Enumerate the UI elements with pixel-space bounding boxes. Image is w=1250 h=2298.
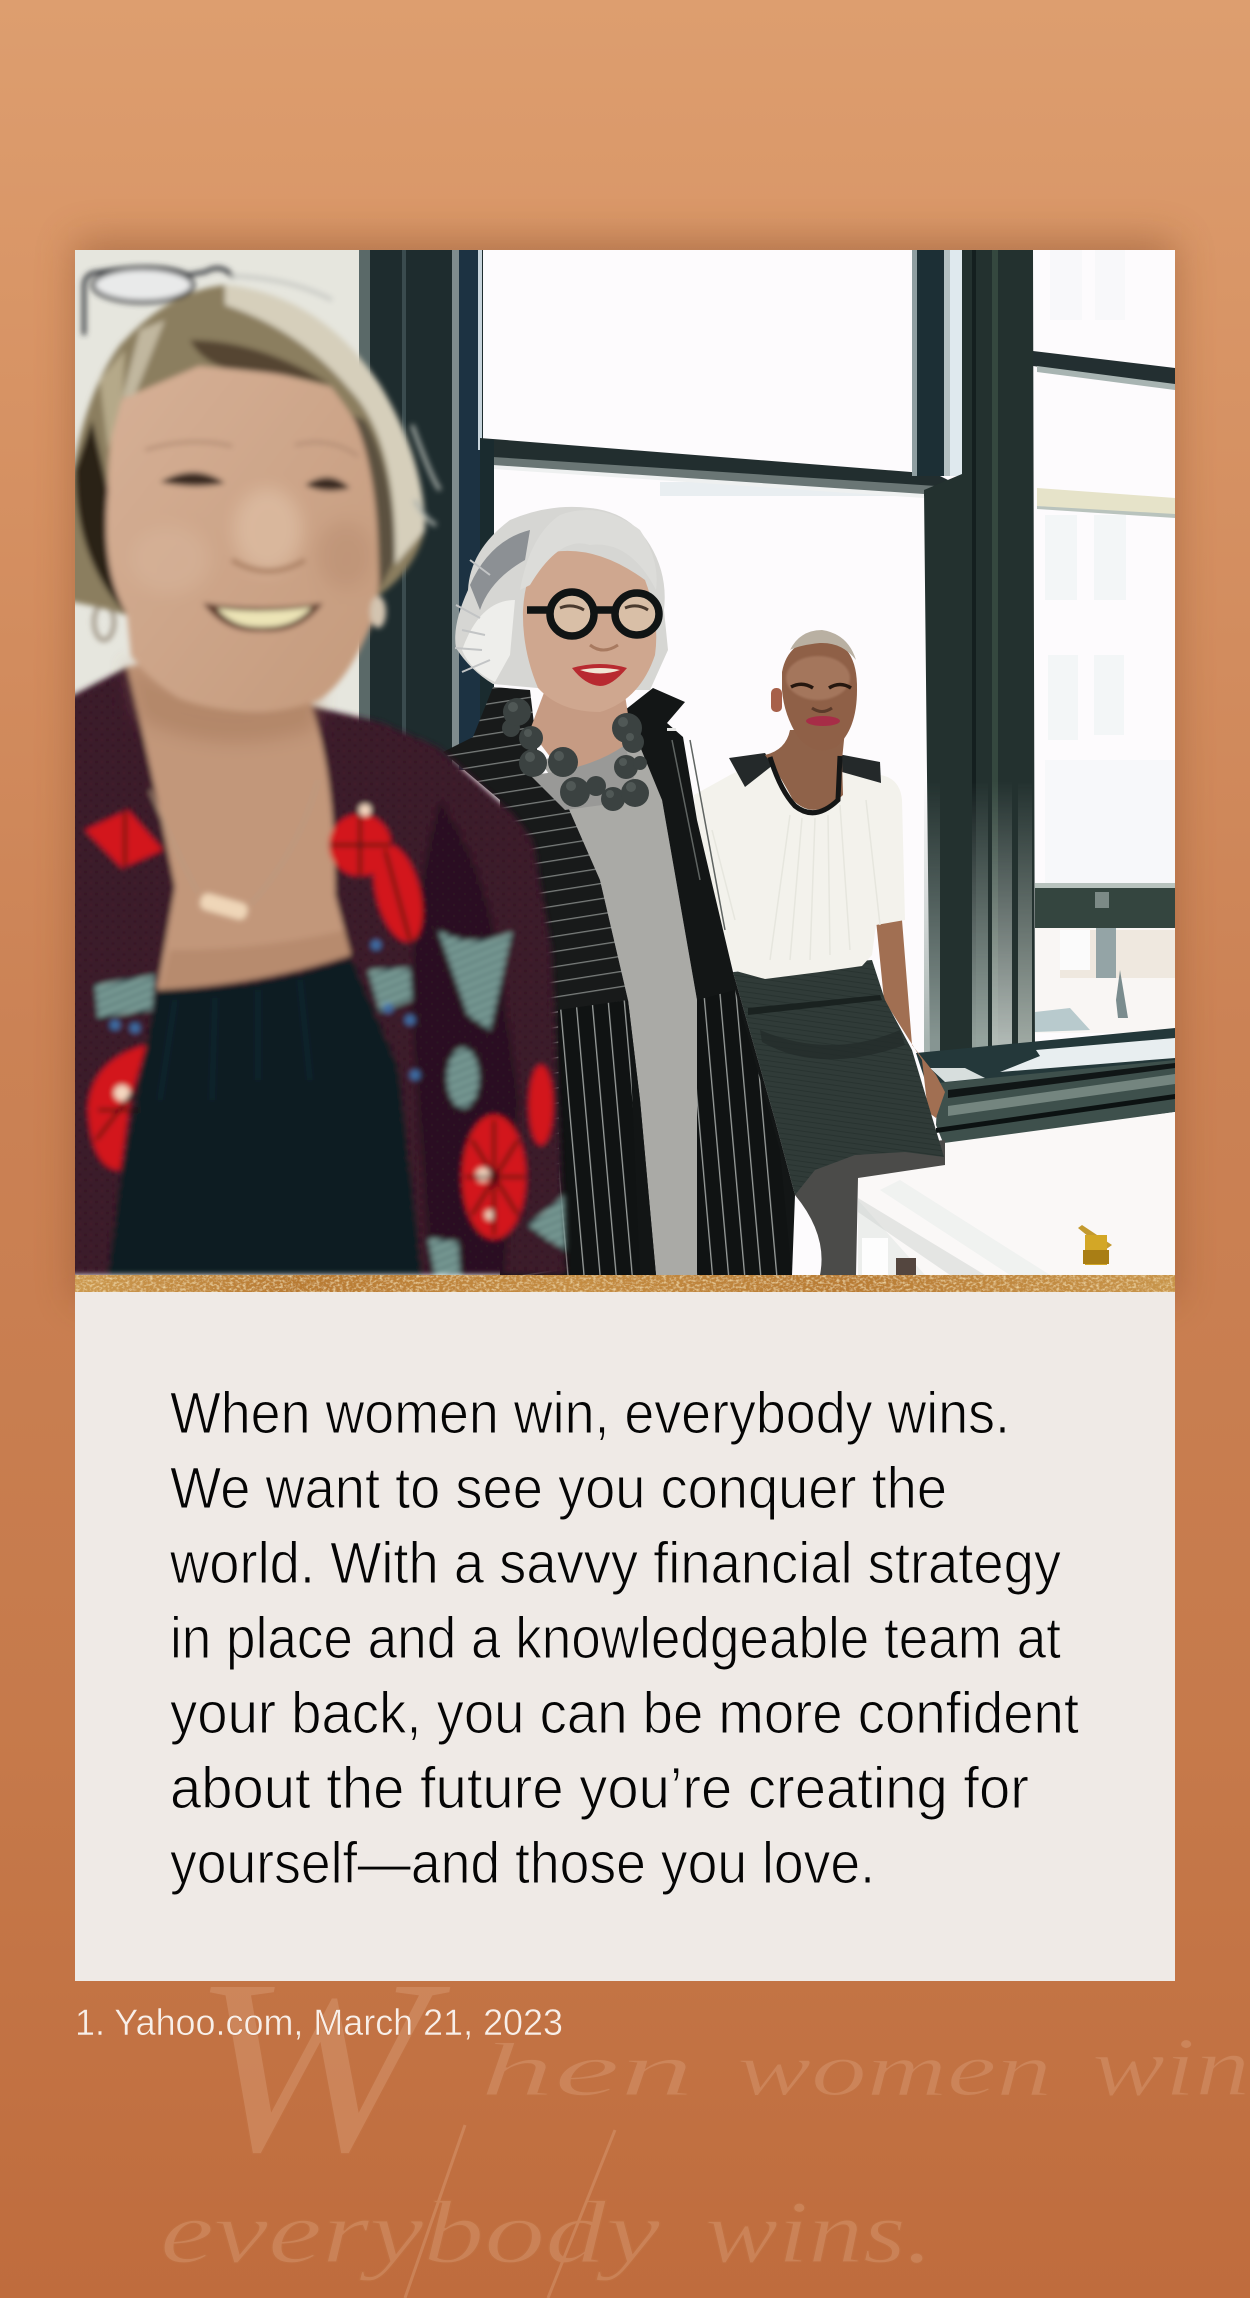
top sash right stile	[912, 250, 962, 476]
gold foil strip	[75, 1275, 1175, 1292]
background script watermark: win	[1092, 2020, 1250, 2114]
fringe	[526, 526, 644, 587]
background script watermark: hen	[480, 2027, 694, 2112]
neck	[532, 694, 628, 767]
reflection below upper sash	[660, 482, 892, 496]
neck and chest	[765, 730, 845, 810]
body copy: When women win, everybody wins.	[170, 1381, 1010, 1446]
body copy: your back, you can be more confident	[170, 1681, 1079, 1746]
brick wall	[75, 250, 361, 750]
face highlights	[234, 488, 302, 572]
right pane rails	[1033, 351, 1175, 928]
brass hardware	[1078, 1225, 1112, 1265]
body copy: about the future you’re creating for	[170, 1756, 1029, 1821]
wispy hair	[412, 425, 440, 525]
left window frame	[359, 250, 483, 770]
upper sash rail	[480, 438, 948, 486]
skirt	[733, 960, 944, 1195]
grey neckline	[530, 745, 640, 810]
nose	[590, 645, 618, 650]
body copy: We want to see you conquer the	[170, 1456, 947, 1521]
body copy: world. With a savvy financial strategy	[169, 1531, 1061, 1596]
legs	[792, 1140, 945, 1275]
red motifs	[85, 810, 553, 1239]
eyes and brows	[160, 472, 350, 491]
bead necklace	[502, 698, 649, 811]
photo: three women by a window	[60, 250, 1175, 1275]
body copy	[169, 1381, 1079, 1896]
background script watermark: wins.	[705, 2183, 933, 2282]
jacket	[60, 667, 566, 1275]
lips	[572, 664, 627, 686]
glasses	[527, 592, 659, 636]
blouse	[694, 756, 905, 979]
background script watermark: women	[737, 2027, 1052, 2112]
hair back	[455, 507, 668, 690]
necklace chain and pendant	[150, 780, 318, 905]
footnote: 1. Yahoo.com, March 21, 2023	[75, 2002, 563, 2043]
woman at right	[694, 630, 945, 1275]
glasses on head	[84, 268, 332, 335]
body copy: in place and a knowledgeable team at	[170, 1606, 1061, 1671]
teal stripe motifs	[95, 930, 566, 1275]
text panel	[75, 1292, 1175, 1981]
smile	[203, 603, 323, 631]
hair highlights	[225, 285, 425, 565]
background script watermark	[160, 1928, 1250, 2298]
head	[782, 643, 857, 738]
face	[106, 366, 379, 712]
coat left panel	[443, 687, 640, 1275]
face	[523, 551, 656, 712]
right pane faint buildings	[1045, 515, 1126, 740]
shoulder patches	[729, 753, 773, 787]
street scene in lower pane	[1035, 928, 1175, 1033]
right arm	[876, 920, 945, 1118]
window sill	[916, 1028, 1175, 1145]
body copy: yourself—and those you love.	[170, 1831, 875, 1896]
grey dress	[540, 740, 697, 1275]
marble table	[858, 1112, 1175, 1275]
background script watermark: everybody	[160, 2183, 661, 2282]
black top	[108, 958, 422, 1275]
ear ring right	[370, 596, 386, 628]
coat right panel	[625, 688, 795, 1275]
earring	[94, 604, 114, 640]
hair wisps	[455, 560, 490, 672]
hair back	[60, 285, 425, 640]
window light	[75, 250, 1175, 1275]
photo shadow	[75, 240, 1175, 1300]
nose	[232, 560, 305, 571]
main window frame column	[924, 250, 1035, 1060]
neck and chest	[127, 660, 351, 990]
woman in centre	[443, 507, 795, 1275]
woman in front (blurred)	[60, 268, 566, 1275]
background script watermark: W	[190, 1928, 455, 2205]
